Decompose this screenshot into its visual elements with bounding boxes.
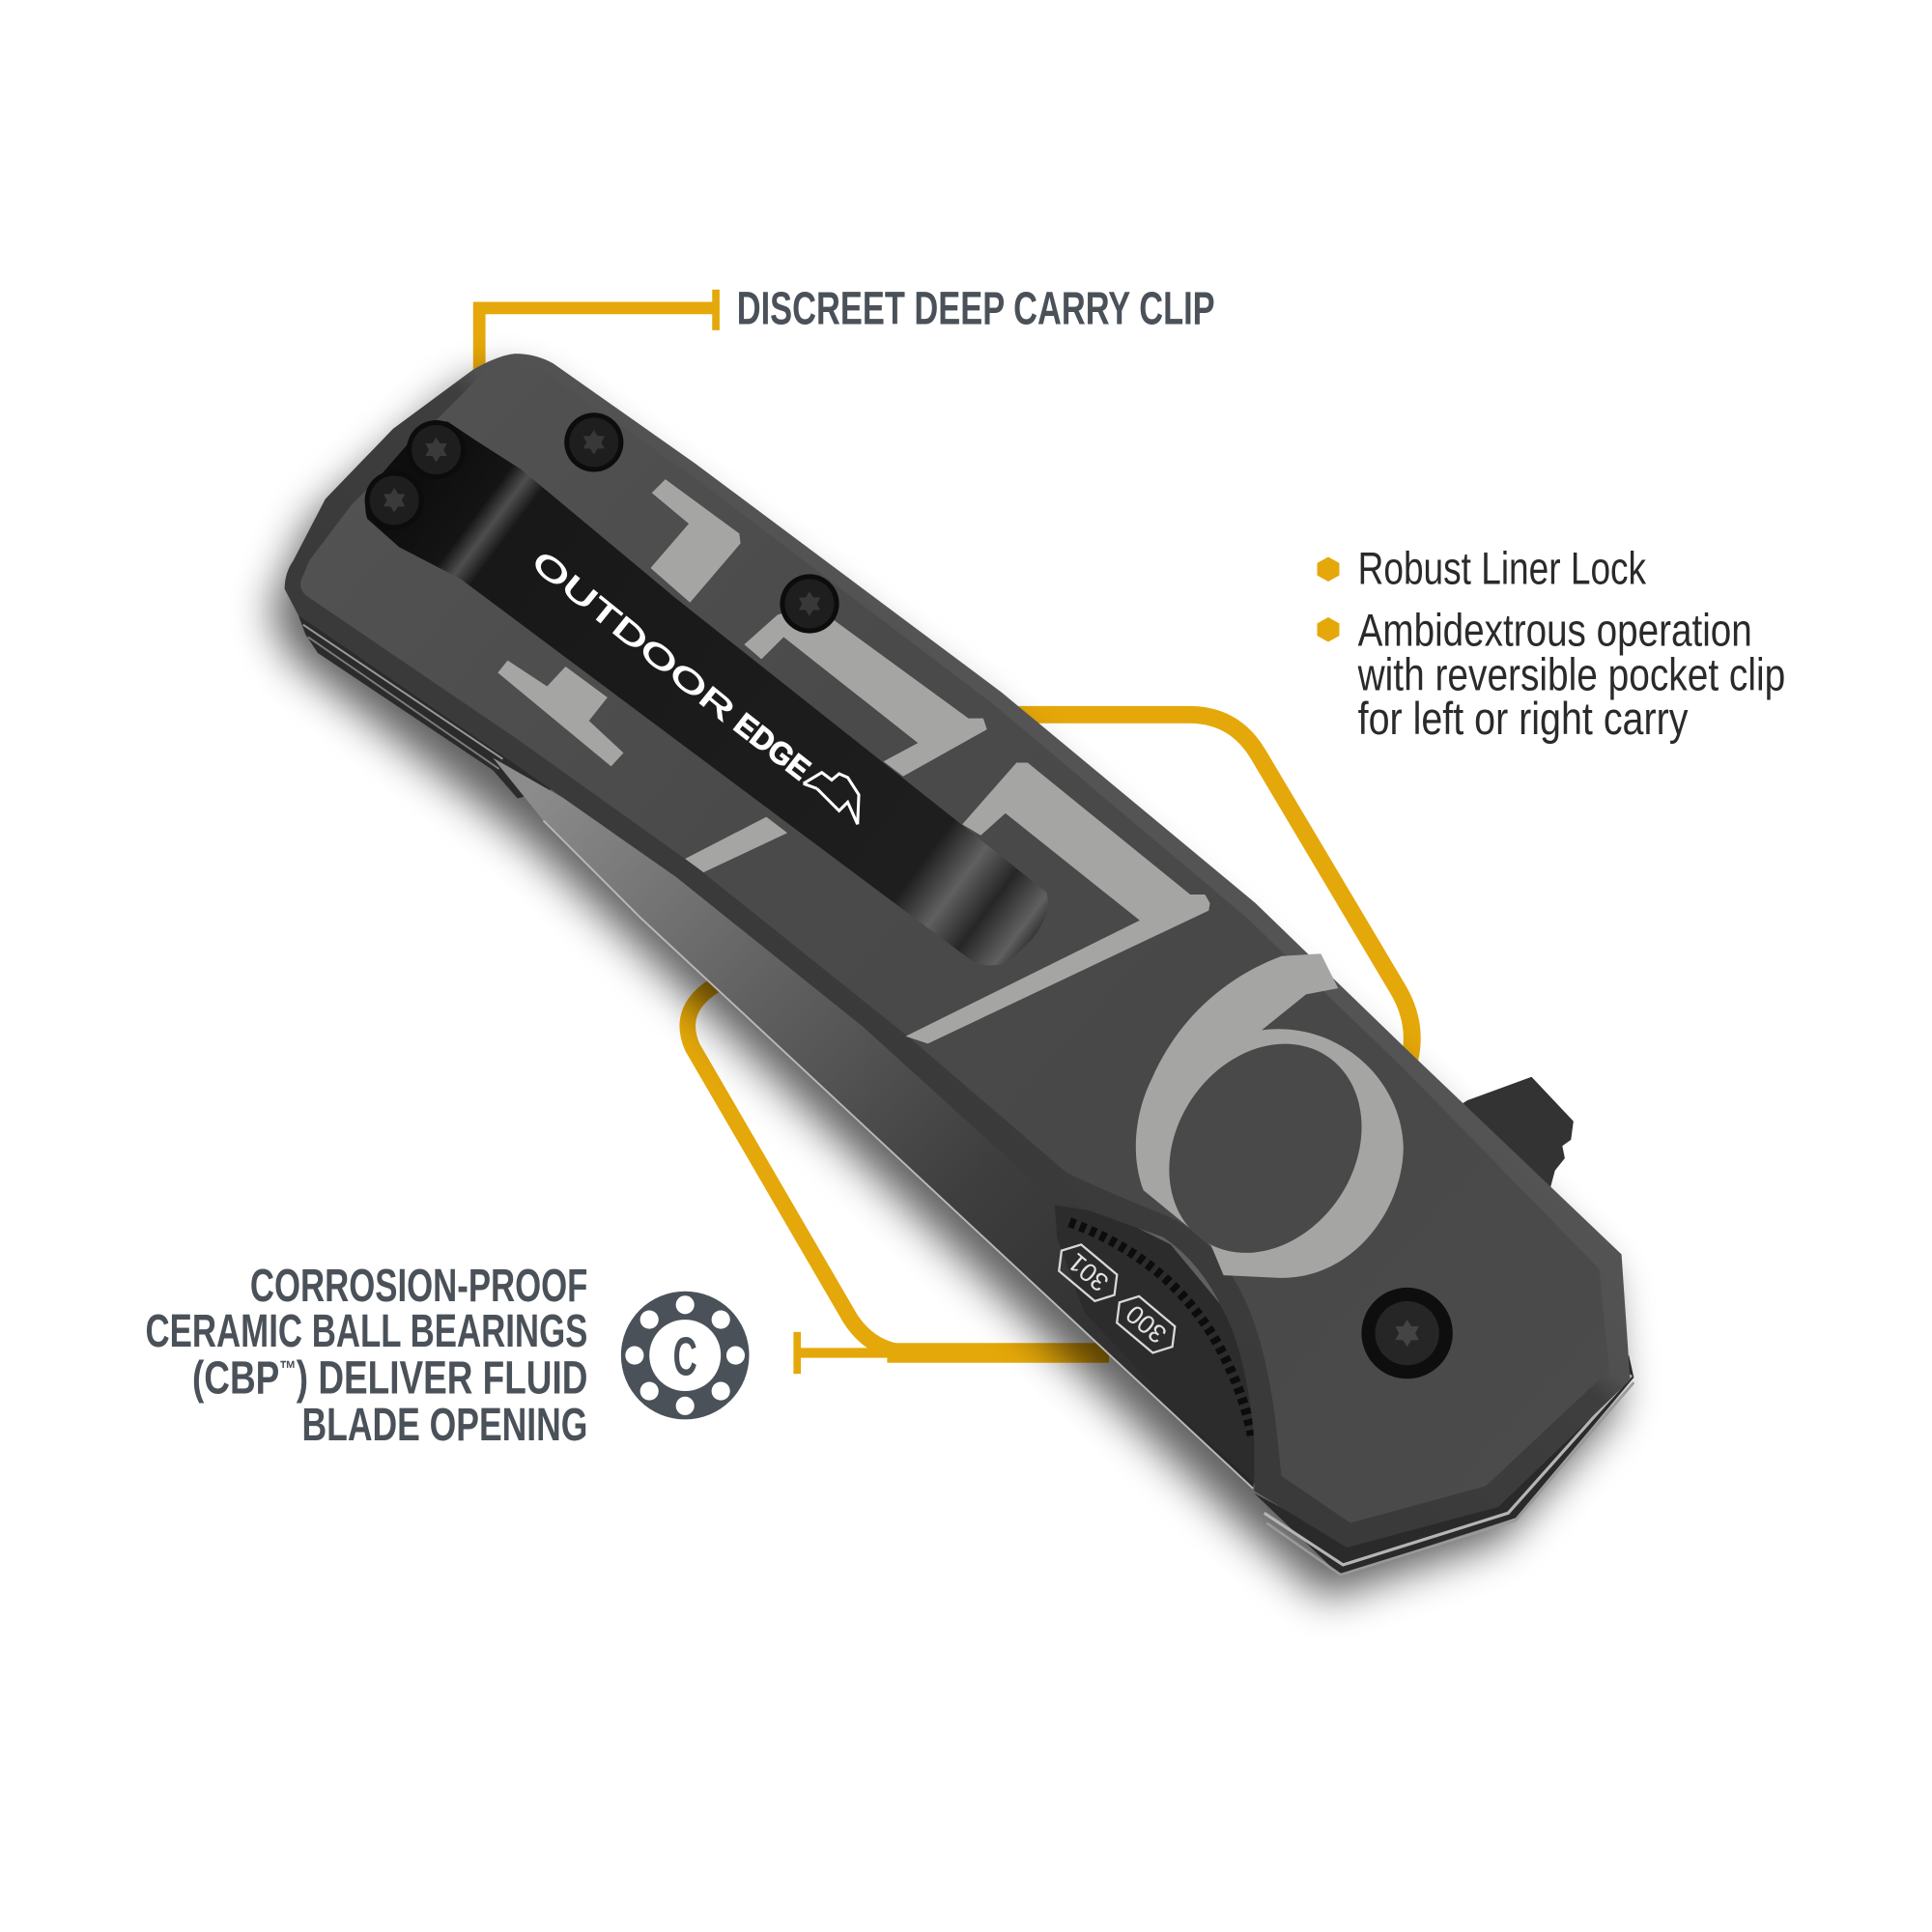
stamp 301: [1050, 1237, 1125, 1308]
callout text: ceramic ball bearings: [146, 1260, 587, 1451]
numeral 1 upper: [650, 479, 741, 603]
bullet text 2: [1357, 605, 1785, 745]
stamp 300: 300: [1121, 1299, 1172, 1350]
clip logo OUTDOOR: OUTDOOR: [526, 544, 742, 728]
handle body: [285, 354, 1631, 1548]
callout text: ceramic ball bearings: CORROSION-PROOF: [250, 1260, 587, 1312]
flipper tab: [1454, 1077, 1574, 1213]
bullet text 1: Robust Liner Lock: [1358, 544, 1646, 595]
numeral 7 first: [744, 605, 987, 777]
stamp 301: 301: [1063, 1247, 1114, 1297]
screw mid: [780, 574, 839, 634]
pocket clip: [365, 420, 1048, 965]
callout text: ceramic ball bearings: (CBP: [192, 1352, 306, 1405]
engraved numerals 1776: [497, 479, 1404, 1278]
bullet text 2: with reversible pocket clip: [1357, 649, 1785, 700]
numeral 6 ring: [1136, 953, 1404, 1278]
clip logo EDGE: EDGE: [727, 706, 817, 786]
numeral 7 first leg: [685, 817, 787, 872]
clip screw bottom: [365, 470, 424, 529]
callout text: ceramic ball bearings: CERAMIC BALL BEARINGS: [146, 1305, 587, 1357]
numeral 6 counter: [1130, 1007, 1401, 1290]
blade: [493, 757, 1269, 1489]
callout text: ceramic ball bearings: BLADE OPENING: [301, 1399, 587, 1451]
clip logo mountains: [804, 773, 859, 824]
bullet icon 2: [1318, 617, 1339, 642]
blade cutting edge: [543, 820, 1253, 1489]
callout text: ceramic ball bearings: ™: [279, 1356, 297, 1381]
rear liner layers: [298, 614, 1634, 1575]
numeral 7 second: [906, 763, 1210, 1043]
knife photo: closed folding knife: [270, 354, 1634, 1598]
clip screw top: [407, 420, 466, 479]
numeral 1 crossbar: [497, 661, 623, 766]
bullet icon 1: [1318, 557, 1339, 582]
bullet text 2: Ambidextrous operation: [1358, 605, 1752, 656]
icon: ceramic ball bearing: [621, 1292, 750, 1419]
bracket: ceramic bearing leader: [688, 983, 1109, 1374]
handle top face: [300, 365, 1609, 1523]
callout text: ceramic ball bearings: ) DELIVER FLUID: [297, 1352, 587, 1405]
icon: ceramic ball bearing: C: [673, 1326, 697, 1386]
screw upper left: [564, 412, 623, 472]
bracket: deep carry clip leader: [479, 290, 720, 370]
knife shadow: [270, 376, 1618, 1598]
heading: discreet deep carry clip: DISCREET DEEP CARRY CLIP: [737, 282, 1215, 334]
stamp 300: [1108, 1290, 1183, 1360]
pivot screw: [1361, 1288, 1453, 1378]
bullet list: [1318, 544, 1785, 745]
bracket: liner lock leader: [1001, 715, 1412, 1060]
serrated thumb ramp: [1055, 1205, 1263, 1486]
bullet text 2: for left or right carry: [1358, 694, 1689, 745]
